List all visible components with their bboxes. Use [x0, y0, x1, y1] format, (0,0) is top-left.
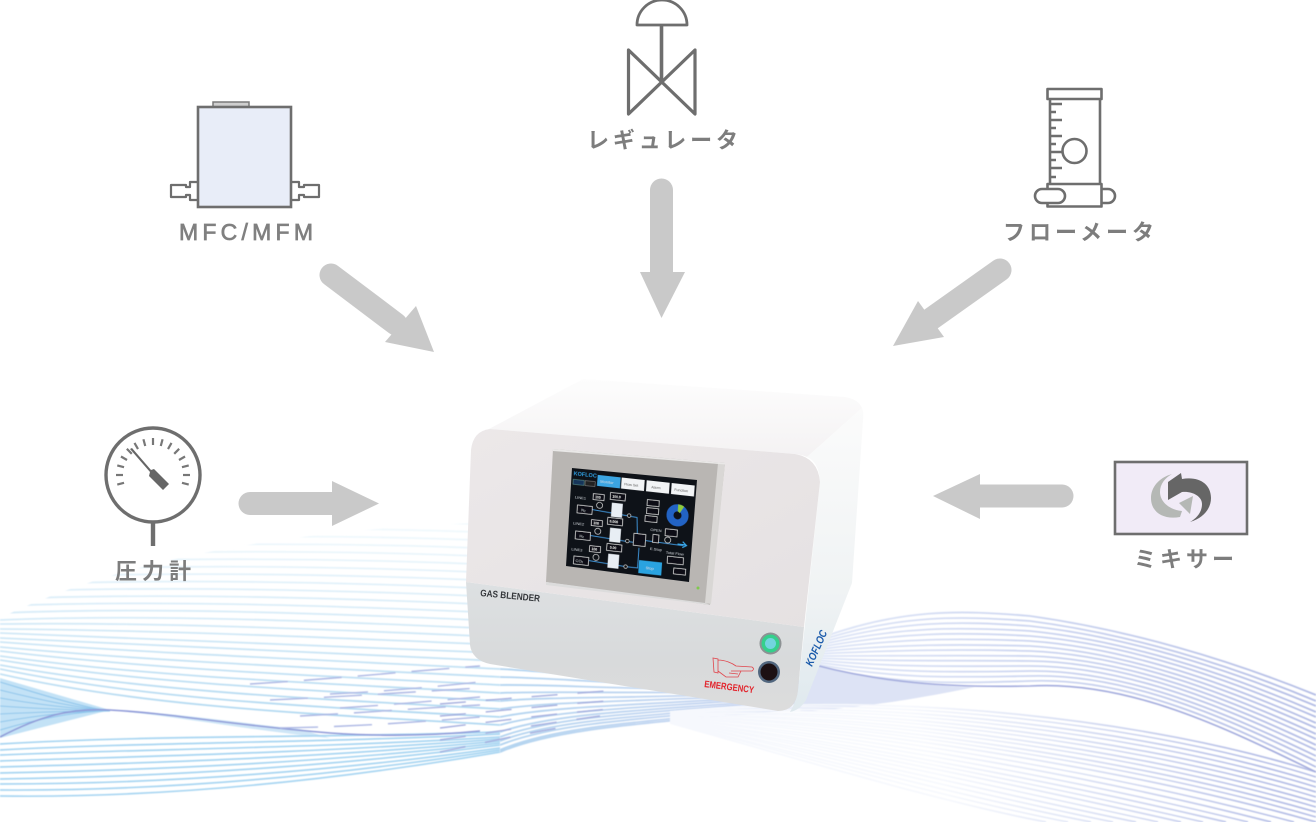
screen tabs: Function: [674, 488, 688, 493]
screen flow line 2: LINE2: [573, 521, 585, 527]
screen flow line 1: N₂: [581, 507, 586, 513]
icon: pointing hand: [713, 658, 754, 677]
label: mixer: ミキサー: [1134, 547, 1234, 572]
background wave: ribbon beneath device: [440, 669, 820, 752]
device front upper panel: [466, 429, 820, 627]
screen flow line 1: [574, 489, 632, 519]
screen flow line 2: H₂: [579, 533, 584, 539]
label: regulator: レギュレータ: [587, 128, 738, 153]
label: MFC/MFM: MFC/MFM: [179, 219, 313, 245]
screen mixer box: [633, 533, 646, 547]
icon: MFC/MFM: [171, 102, 319, 207]
screen flow line 3: [570, 540, 629, 570]
icon: pressure gauge: [106, 428, 200, 546]
screen mode buttons: [573, 479, 595, 487]
screen flow line 1: 100: [595, 495, 601, 500]
label: pressure gauge: 圧力計: [115, 559, 191, 584]
device: gas blender: [466, 379, 863, 712]
arrow: MFC to device: [331, 275, 434, 352]
screen flow line 3: LINE3: [571, 547, 583, 553]
label: flow meter: フローメータ: [1003, 220, 1154, 245]
icon: flow meter: [1035, 89, 1115, 206]
device front lower panel: [466, 582, 804, 711]
arrow: regulator to device: [640, 190, 685, 318]
status LED: [696, 586, 700, 590]
icon: regulator valve: [628, 0, 695, 114]
arrow: flow meter to device: [893, 270, 1000, 346]
device side face: [790, 408, 863, 712]
screen output section: Total Flow: [666, 550, 684, 557]
icon: mixer: [1115, 462, 1247, 534]
device top face: [487, 379, 862, 457]
screen tabs: [597, 475, 695, 497]
label: EMERGENCY: EMERGENCY: [704, 679, 755, 696]
screen contents: monitor UI: [567, 471, 695, 579]
arrow: pressure gauge to device: [250, 481, 379, 526]
screen flow line 2: 100: [593, 521, 599, 526]
screen tabs: Flow Set: [624, 482, 638, 488]
screen donut chart: [669, 504, 686, 524]
screen flow pipes: [589, 510, 685, 573]
touch screen: [566, 468, 697, 582]
background wave: left ribbon: [0, 521, 500, 796]
button: emergency stop: [758, 661, 780, 683]
logo on side panel: KOFLOC: [804, 628, 831, 668]
screen flow line 3: 100: [591, 547, 597, 552]
screen flow line 1: LINE1: [575, 495, 587, 501]
screen output section: [647, 527, 688, 575]
screen tabs: Monitor: [600, 479, 614, 485]
button: power: [760, 632, 782, 654]
screen tabs: Alarm: [651, 485, 661, 490]
label: GAS BLENDER: GAS BLENDER: [480, 588, 541, 605]
screen flow line 2: [572, 514, 631, 545]
screen flow line 2: 0.000: [609, 520, 618, 524]
screen flow line 3: CO₂: [575, 558, 584, 564]
arrow: mixer to device: [933, 474, 1062, 519]
touch screen bezel: [546, 449, 725, 605]
screen stop button: Stop: [645, 565, 655, 571]
screen logo: KOFLOC: [573, 471, 597, 480]
background wave: right ribbon: [670, 612, 1316, 822]
screen flow line 3: 0.00: [610, 546, 617, 550]
screen output section: OPEN: [650, 527, 662, 533]
screen ratio boxes: [645, 499, 659, 523]
screen flow line 1: 100.0: [612, 495, 621, 500]
screen output section: E.Stop: [650, 546, 663, 553]
